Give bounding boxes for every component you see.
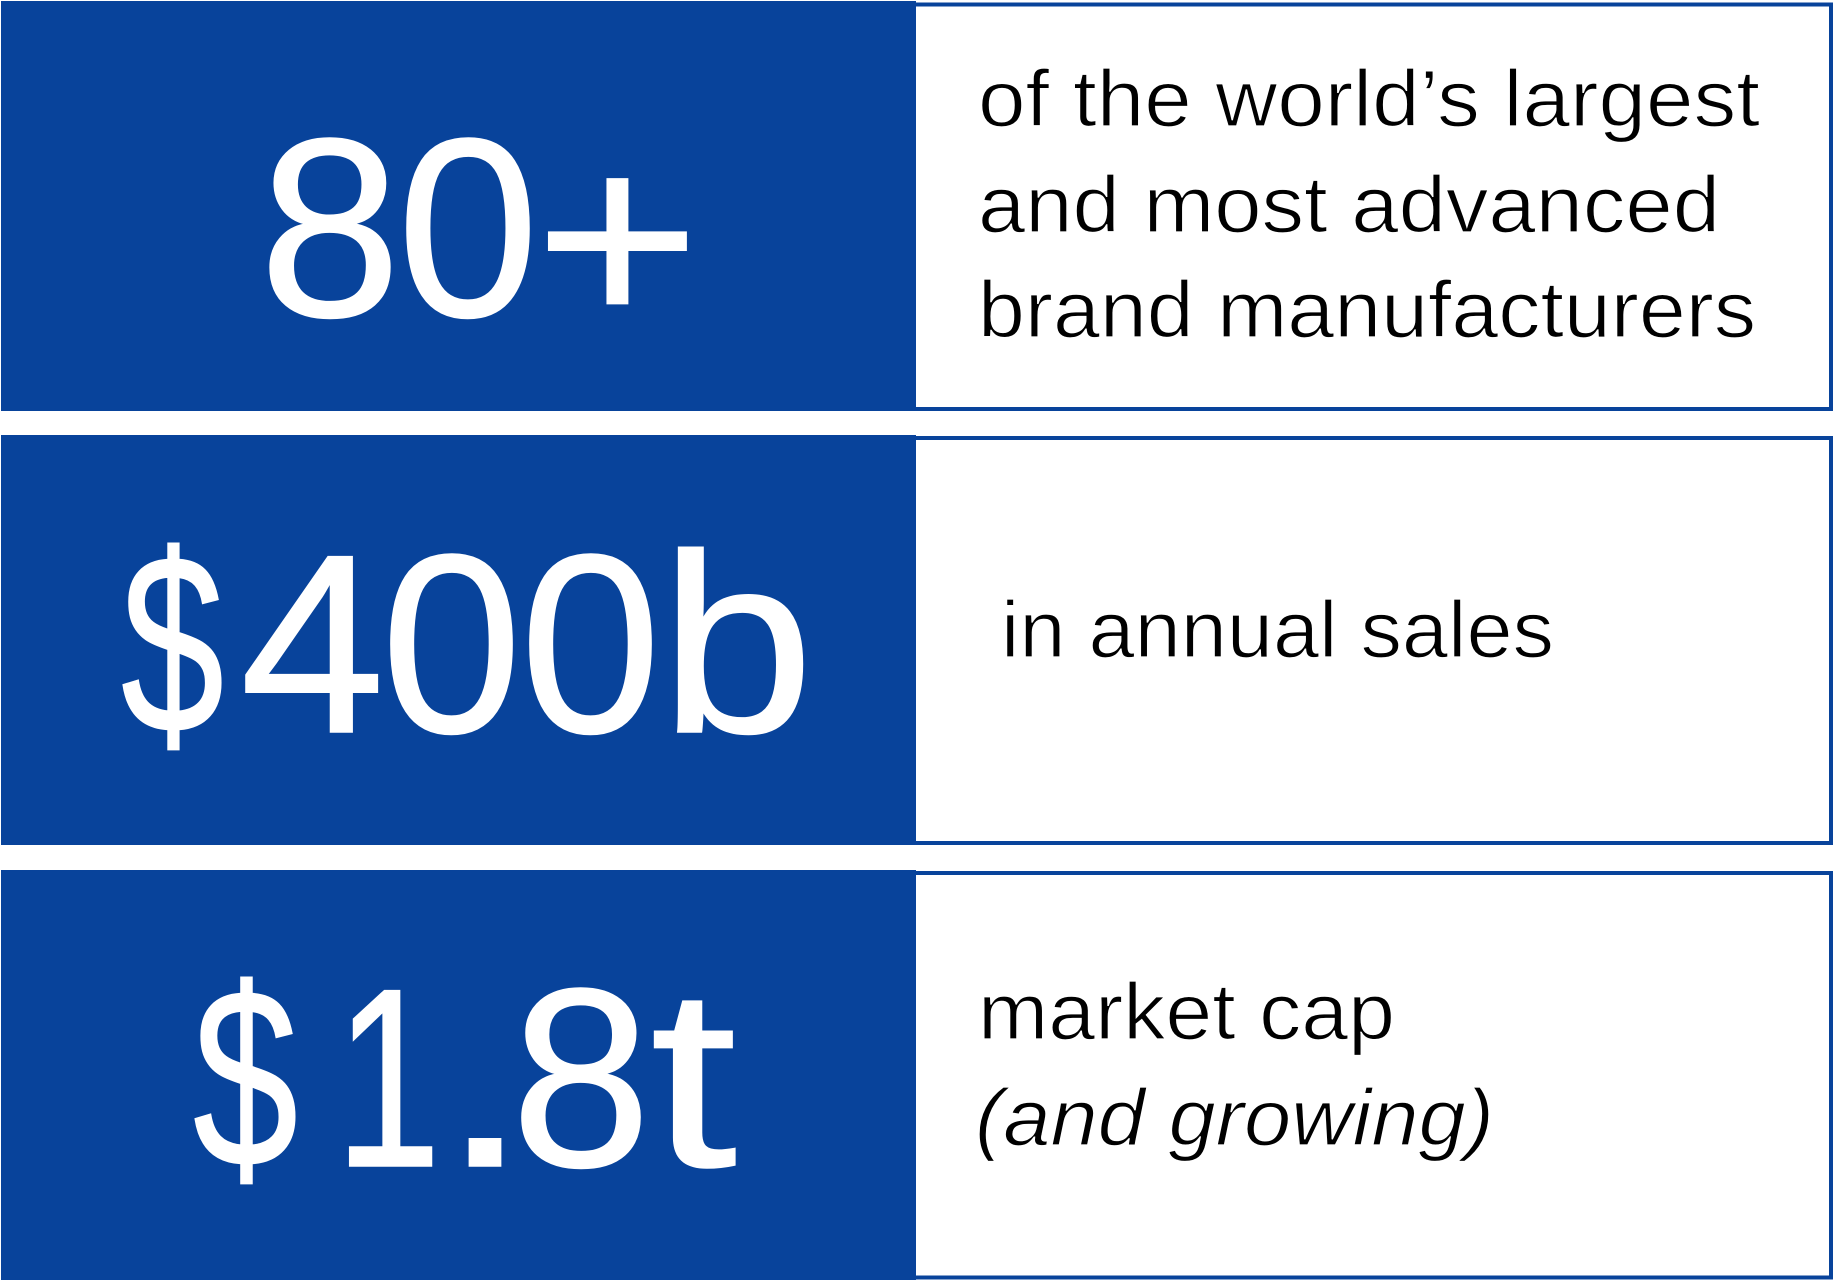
- stat number: +: [535, 96, 700, 381]
- stat number: 8: [259, 86, 401, 371]
- stat panel: [1, 1, 916, 411]
- stat number: $: [121, 502, 224, 787]
- stat number: 4: [240, 502, 385, 787]
- stat number: .: [440, 936, 530, 1221]
- stat number: 0: [381, 502, 522, 787]
- description text: brand manufacturers: [978, 265, 1756, 354]
- stat number: $: [193, 936, 298, 1221]
- description text: [975, 967, 1494, 1162]
- row: $1.8t market cap: [1, 870, 1831, 1280]
- description text: and most advanced: [978, 160, 1720, 249]
- description text: market cap: [978, 967, 1395, 1056]
- stat panel: [1, 435, 916, 845]
- description text: [978, 54, 1760, 354]
- description text: in annual sales: [1001, 585, 1554, 674]
- stat number: 1: [335, 936, 441, 1221]
- description text: (and growing): [975, 1073, 1494, 1162]
- stat number: 0: [520, 502, 661, 787]
- stat number: 8: [511, 936, 651, 1221]
- stat panel: [1, 870, 916, 1280]
- row: $400b annual sales: [1, 435, 1831, 845]
- description panel outline: [912, 873, 1831, 1278]
- row: 80+ manufacturers: [1, 1, 1831, 411]
- stat number: 0: [397, 86, 539, 371]
- description panel outline: [912, 438, 1831, 843]
- stat number: b: [660, 502, 814, 787]
- description text: of the world’s largest: [978, 54, 1760, 143]
- stat number: t: [650, 936, 737, 1221]
- description panel outline: [912, 4, 1831, 409]
